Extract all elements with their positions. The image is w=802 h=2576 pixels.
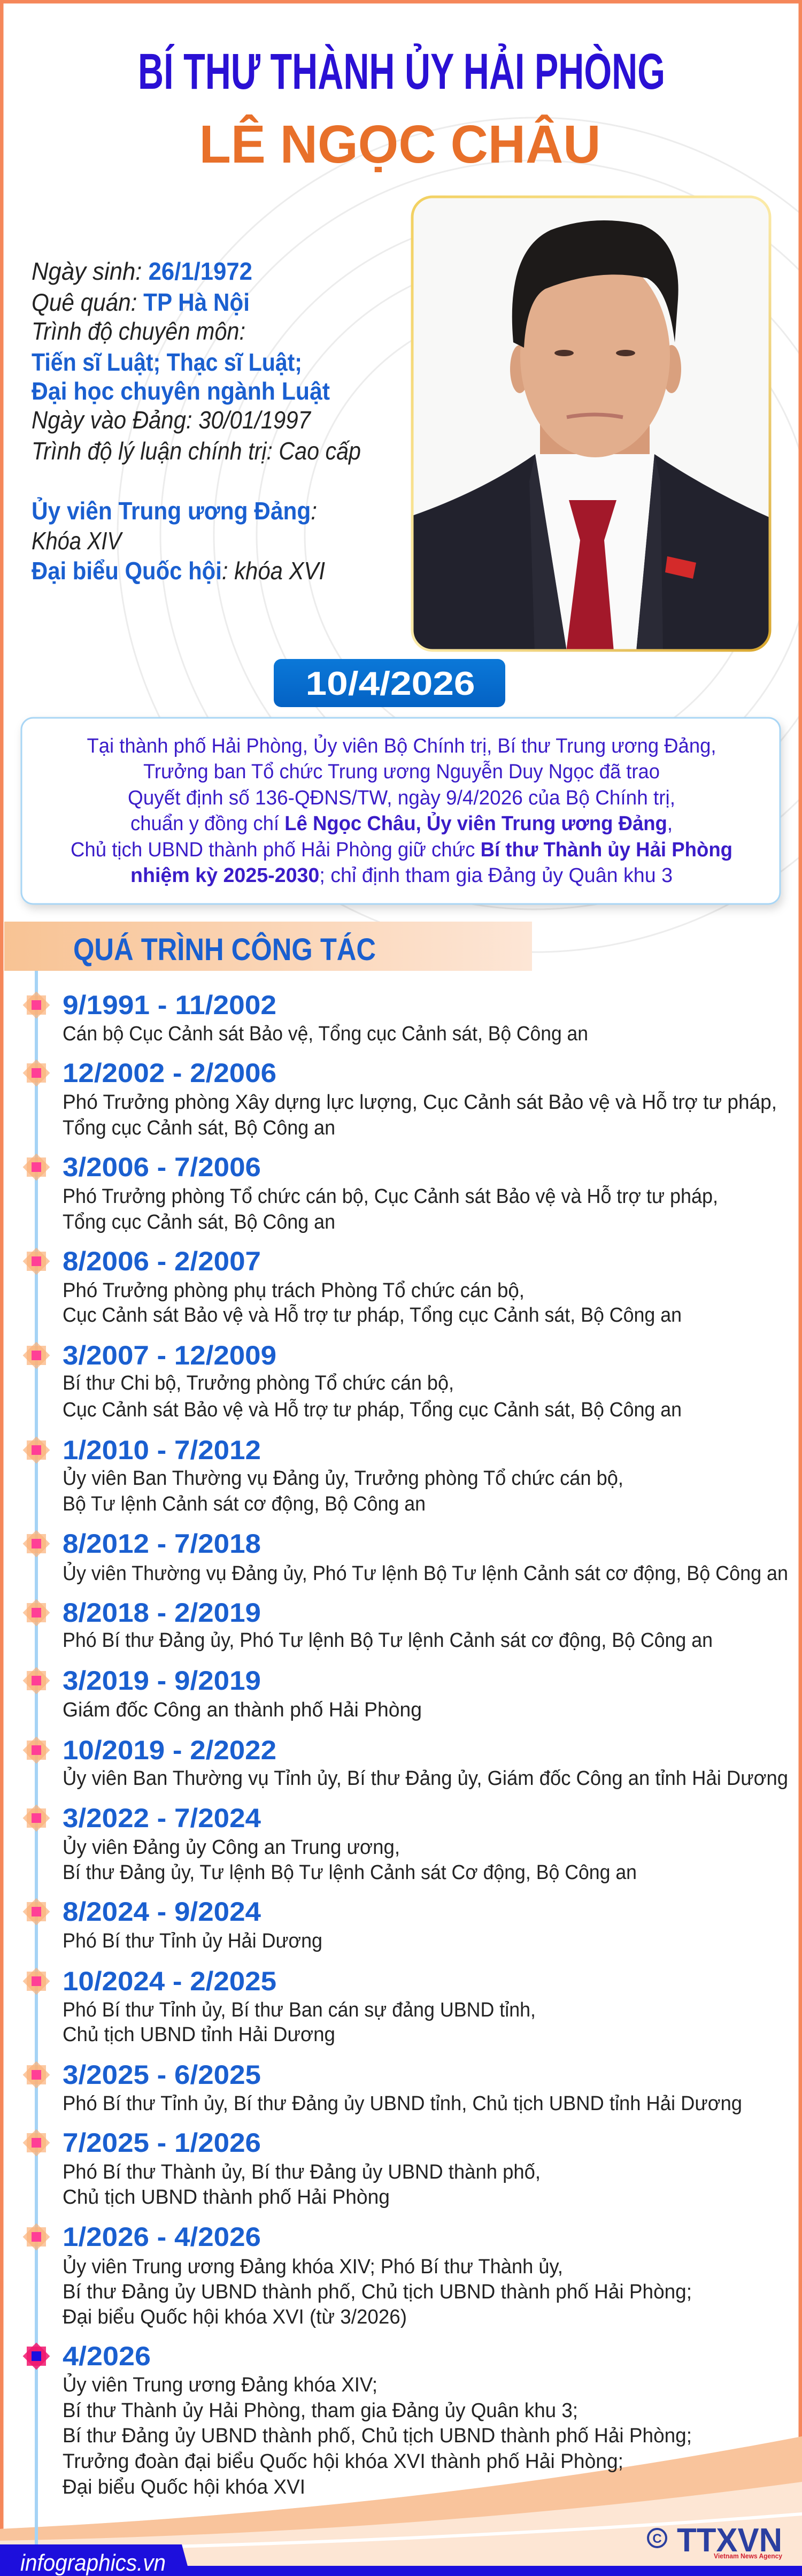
- entry 12: 8/2024 - 9/2024: [63, 1897, 261, 1927]
- personal info: Tiến sĩ Luật; Thạc sĩ Luật;: [32, 348, 302, 376]
- entry 15: Chủ tịch UBND thành phố Hải Phòng: [63, 2186, 390, 2209]
- logo: TTXVN: C: [652, 2532, 662, 2546]
- section header: work history: QUÁ TRÌNH CÔNG TÁC: [73, 932, 376, 967]
- entry 2: Tổng cục Cảnh sát, Bộ Công an: [63, 1117, 335, 1139]
- entry 17 (current): Bí thư Đảng ủy UBND thành phố, Chủ tịch UBND thành phố Hải Phòng;: [63, 2425, 692, 2447]
- entry 8: [23, 1598, 713, 1652]
- announcement box: [21, 718, 780, 904]
- entry 4: [23, 1246, 682, 1327]
- entry 16: Bí thư Đảng ủy UBND thành phố, Chủ tịch UBND thành phố Hải Phòng;: [63, 2281, 692, 2303]
- ears: [510, 345, 525, 393]
- entry 17 (current): 4/2026: [63, 2341, 151, 2371]
- announcement box: Trưởng ban Tổ chức Trung ương Nguyễn Duy Ngọc đã trao: [143, 760, 660, 783]
- date badge: 10/4/2026: [306, 665, 475, 702]
- entry 1: Cán bộ Cục Cảnh sát Bảo vệ, Tổng cục Cảnh sát, Bộ Công an: [63, 1023, 588, 1045]
- logo: TTXVN: TTXVN: [677, 2522, 782, 2559]
- entry 14: [23, 2060, 742, 2115]
- entry 16: Ủy viên Trung ương Đảng khóa XIV; Phó Bí thư Thành ủy,: [63, 2255, 563, 2278]
- entry 15: Phó Bí thư Thành ủy, Bí thư Đảng ủy UBND thành phố,: [63, 2161, 541, 2183]
- announcement box: Chủ tịch UBND thành phố Hải Phòng giữ chức Bí thư Thành ủy Hải Phòng: [71, 839, 732, 861]
- timeline entries: [23, 990, 788, 2498]
- personal info: Trình độ lý luận chính trị: Cao cấp: [32, 437, 361, 465]
- entry 13: Phó Bí thư Tỉnh ủy, Bí thư Ban cán sự đảng UBND tỉnh,: [63, 1999, 536, 2021]
- personal info: Ủy viên Trung ương Đảng:: [32, 497, 317, 525]
- personal info: Quê quán: TP Hà Nội: [32, 288, 250, 316]
- entry 1: [23, 990, 588, 1045]
- entry 4: Cục Cảnh sát Bảo vệ và Hỗ trợ tư pháp, Tổng cục Cảnh sát, Bộ Công an: [63, 1304, 682, 1327]
- entry 15: 7/2025 - 1/2026: [63, 2128, 261, 2158]
- entry 13: Chủ tịch UBND tỉnh Hải Dương: [63, 2023, 335, 2046]
- entry 13: 10/2024 - 2/2025: [63, 1966, 276, 1996]
- entry 11: [23, 1803, 637, 1884]
- entry 1: 9/1991 - 11/2002: [63, 990, 276, 1020]
- entry 16: Đại biểu Quốc hội khóa XVI (từ 3/2026): [63, 2306, 407, 2328]
- entry 4: Phó Trưởng phòng phụ trách Phòng Tổ chức cán bộ,: [63, 1279, 525, 1302]
- personal info: Ngày sinh: 26/1/1972: [32, 257, 252, 285]
- entry 6: 1/2010 - 7/2012: [63, 1435, 261, 1465]
- entry 7: 8/2012 - 7/2018: [63, 1529, 261, 1559]
- entry 16: [23, 2222, 692, 2328]
- entry 11: Bí thư Đảng ủy, Tư lệnh Bộ Tư lệnh Cảnh sát Cơ động, Bộ Công an: [63, 1861, 637, 1884]
- entry 6: Ủy viên Ban Thường vụ Đảng ủy, Trưởng phòng Tổ chức cán bộ,: [63, 1466, 623, 1490]
- entry 3: [23, 1152, 718, 1233]
- entry 17 (current): Bí thư Thành ủy Hải Phòng, tham gia Đảng ủy Quân khu 3;: [63, 2399, 578, 2422]
- entry 4: 8/2006 - 2/2007: [63, 1246, 261, 1276]
- entry 2: 12/2002 - 2/2006: [63, 1058, 276, 1088]
- announcement box: Quyết định số 136-QĐNS/TW, ngày 9/4/2026 của Bộ Chính trị,: [128, 787, 675, 809]
- personal info: Đại biểu Quốc hội: khóa XVI: [32, 557, 325, 585]
- footer bar: infographics.vn: [20, 2550, 166, 2576]
- entry 3: Phó Trưởng phòng Tổ chức cán bộ, Cục Cảnh sát Bảo vệ và Hỗ trợ tư pháp,: [63, 1185, 718, 1208]
- suit: [406, 454, 775, 658]
- neck: [540, 425, 650, 454]
- announcement box: chuẩn y đồng chí Lê Ngọc Châu, Ủy viên Trung ương Đảng,: [130, 811, 673, 835]
- eyes mouth: [554, 350, 574, 356]
- entry 16: 1/2026 - 4/2026: [63, 2222, 261, 2252]
- entry 13: [23, 1966, 536, 2046]
- entry 5: Bí thư Chi bộ, Trưởng phòng Tổ chức cán bộ,: [63, 1372, 454, 1394]
- personal info: Ngày vào Đảng: 30/01/1997: [32, 406, 311, 434]
- personal info: Trình độ chuyên môn:: [32, 317, 245, 345]
- entry 3: Tổng cục Cảnh sát, Bộ Công an: [63, 1211, 335, 1233]
- entry 17 (current): Ủy viên Trung ương Đảng khóa XIV;: [63, 2373, 377, 2396]
- timeline line: [35, 971, 38, 2566]
- tie: [566, 500, 616, 651]
- announcement box: nhiệm kỳ 2025-2030; chỉ định tham gia Đảng ủy Quân khu 3: [130, 864, 673, 887]
- entry 17 (current): Trưởng đoàn đại biểu Quốc hội khóa XVI thành phố Hải Phòng;: [63, 2450, 623, 2473]
- personal info: [32, 257, 361, 585]
- entry 17 (current): [23, 2341, 692, 2498]
- entry 8: 8/2018 - 2/2019: [63, 1598, 261, 1628]
- portrait photo: [406, 197, 775, 658]
- personal info: Khóa XIV: [32, 527, 124, 555]
- entry 3: 3/2006 - 7/2006: [63, 1152, 261, 1182]
- shirt: [535, 454, 654, 651]
- entry 6: [23, 1435, 623, 1515]
- entry 9: Giám đốc Công an thành phố Hải Phòng: [63, 1699, 422, 1721]
- entry 10: 10/2019 - 2/2022: [63, 1735, 276, 1765]
- entry 12: Phó Bí thư Tỉnh ủy Hải Dương: [63, 1930, 322, 1952]
- entry 2: [23, 1058, 777, 1139]
- entry 8: Phó Bí thư Đảng ủy, Phó Tư lệnh Bộ Tư lệnh Cảnh sát cơ động, Bộ Công an: [63, 1629, 713, 1652]
- entry 5: 3/2007 - 12/2009: [63, 1340, 276, 1370]
- background pattern: faint drum: [118, 118, 802, 952]
- footer bar: [0, 2544, 802, 2576]
- pin: [665, 556, 696, 579]
- entry 14: 3/2025 - 6/2025: [63, 2060, 261, 2090]
- entry 15: [23, 2128, 541, 2209]
- date badge: [274, 659, 505, 707]
- personal info: Đại học chuyên ngành Luật: [32, 377, 330, 405]
- entry 12: [23, 1897, 322, 1952]
- entry 5: [23, 1340, 682, 1421]
- entry 14: Phó Bí thư Tỉnh ủy, Bí thư Đảng ủy UBND tỉnh, Chủ tịch UBND tỉnh Hải Dương: [63, 2092, 742, 2115]
- entry 9: [23, 1666, 422, 1721]
- entry 10: Ủy viên Ban Thường vụ Tỉnh ủy, Bí thư Đảng ủy, Giám đốc Công an tỉnh Hải Dương: [63, 1766, 788, 1790]
- entry 9: 3/2019 - 9/2019: [63, 1666, 261, 1696]
- hair: [512, 220, 678, 348]
- entry 2: Phó Trưởng phòng Xây dựng lực lượng, Cục Cảnh sát Bảo vệ và Hỗ trợ tư pháp,: [63, 1091, 777, 1114]
- entry 11: 3/2022 - 7/2024: [63, 1803, 261, 1833]
- entry 6: Bộ Tư lệnh Cảnh sát cơ động, Bộ Công an: [63, 1493, 426, 1515]
- entry 7: [23, 1529, 788, 1585]
- entry 5: Cục Cảnh sát Bảo vệ và Hỗ trợ tư pháp, Tổng cục Cảnh sát, Bộ Công an: [63, 1398, 682, 1421]
- footer background swoosh: [0, 2436, 802, 2567]
- logo: TTXVN: Vietnam News Agency: [714, 2552, 783, 2560]
- section header: work history: [4, 922, 532, 971]
- face: [520, 254, 670, 457]
- entry 17 (current): Đại biểu Quốc hội khóa XVI: [63, 2476, 305, 2498]
- entry 11: Ủy viên Đảng ủy Công an Trung ương,: [63, 1835, 400, 1859]
- name heading: LÊ NGỌC CHÂU: [199, 114, 601, 174]
- entry 10: [23, 1735, 788, 1790]
- announcement box: Tại thành phố Hải Phòng, Ủy viên Bộ Chính trị, Bí thư Trung ương Đảng,: [87, 734, 716, 757]
